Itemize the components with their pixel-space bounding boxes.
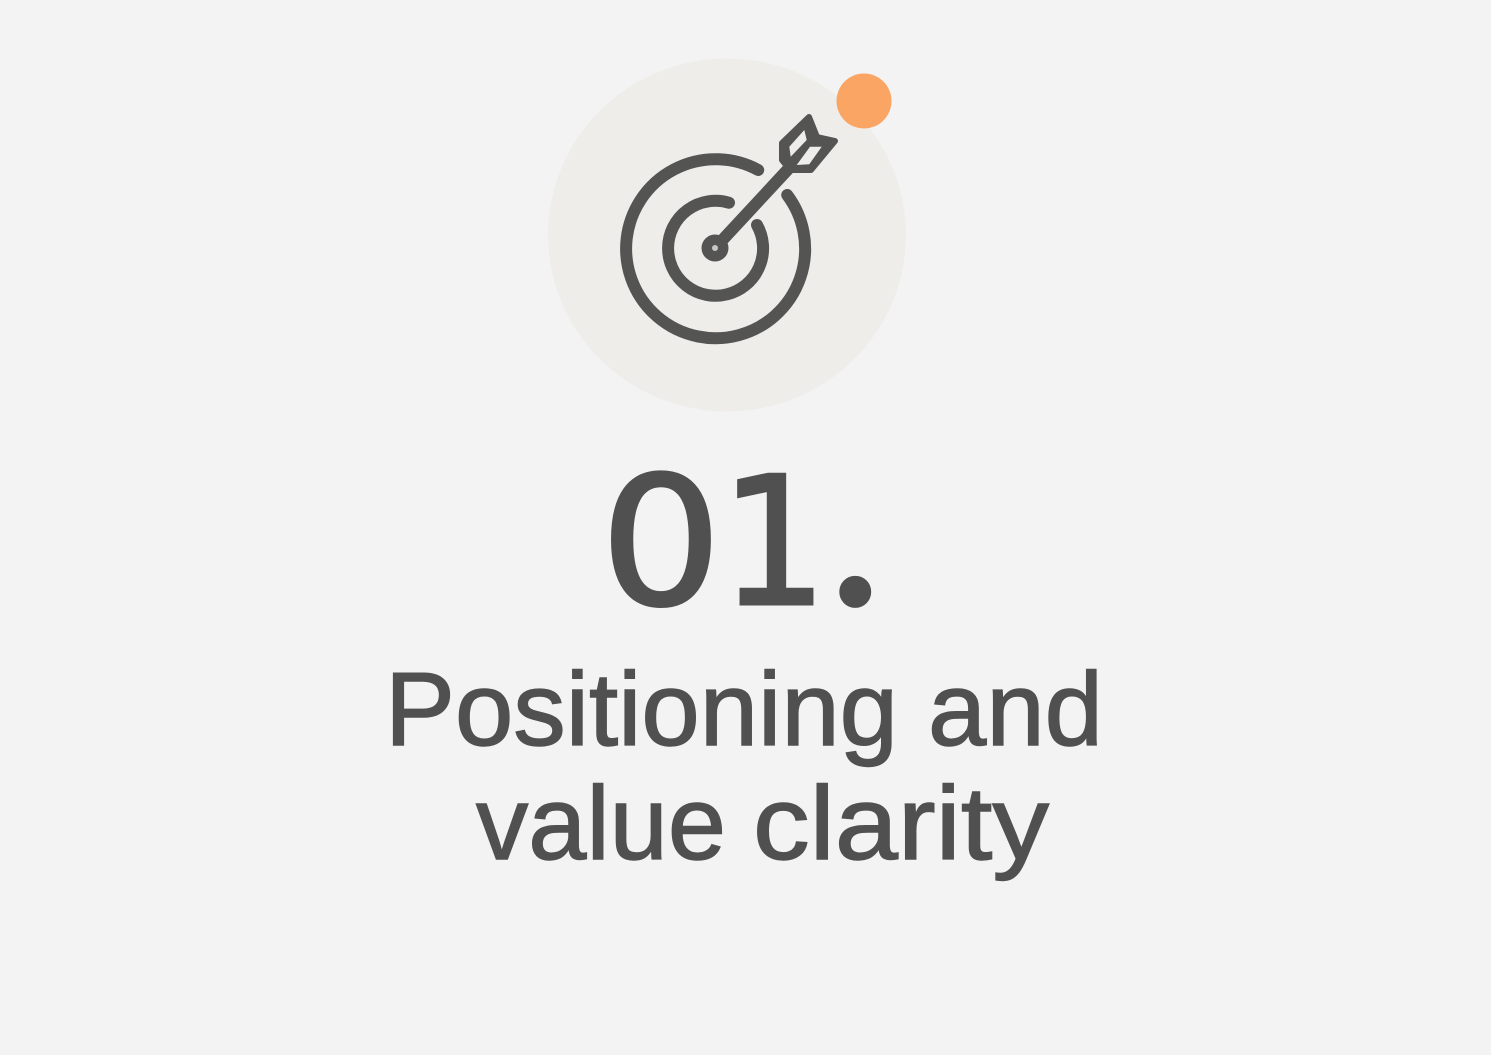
heading line 1: Positioning: [385, 652, 898, 768]
target outer ring: [626, 159, 805, 338]
heading line 2: clarity: [753, 766, 1049, 882]
target inner ring: [668, 201, 763, 296]
icon badge: background circle: [548, 58, 906, 412]
fletching window upper: [789, 130, 807, 157]
period: .: [822, 364, 889, 663]
digit zero and one: 1: [720, 439, 828, 646]
heading line 2: value: [476, 766, 726, 882]
target centre highlight: [712, 245, 718, 251]
digit zero and one: 0: [600, 439, 722, 646]
heading: step title: [385, 652, 1103, 882]
arrow fletching: [782, 117, 835, 170]
arrow shaft: [715, 165, 792, 248]
fletching window lower: [797, 147, 822, 165]
heading line 1: and: [928, 652, 1103, 768]
target centre dot: [702, 234, 728, 262]
icon: target with arrow: [626, 117, 835, 338]
step number: [600, 364, 889, 663]
icon: orange accent dot: [836, 74, 892, 128]
